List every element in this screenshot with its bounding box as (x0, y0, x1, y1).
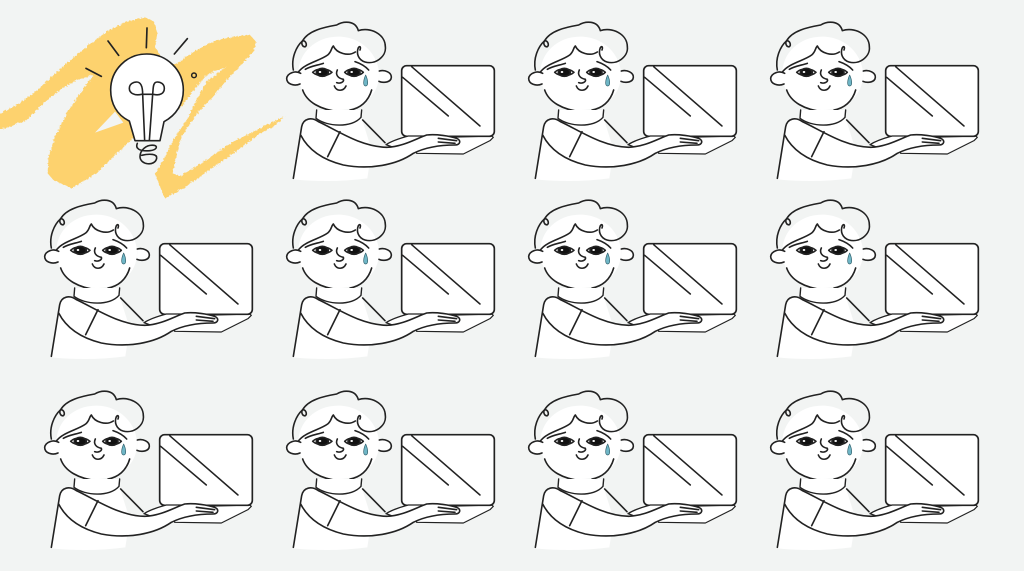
character row 1, column 3 (529, 22, 736, 181)
character row 2, column 1 (45, 200, 252, 359)
character row 1, column 2 (287, 22, 494, 181)
character row 3, column 4 (771, 391, 978, 550)
icon: lightbulb on yellow scribble (0, 17, 285, 198)
character row 2, column 4 (771, 200, 978, 359)
character row 2, column 2 (287, 200, 494, 359)
light rays (86, 28, 187, 76)
yellow brush scribble (0, 17, 285, 198)
character row 3, column 2 (287, 391, 494, 550)
character row 3, column 1 (45, 391, 252, 550)
character row 1, column 4 (771, 22, 978, 181)
character row 3, column 3 (529, 391, 736, 550)
character row 2, column 3 (529, 200, 736, 359)
lightbulb (86, 28, 196, 164)
